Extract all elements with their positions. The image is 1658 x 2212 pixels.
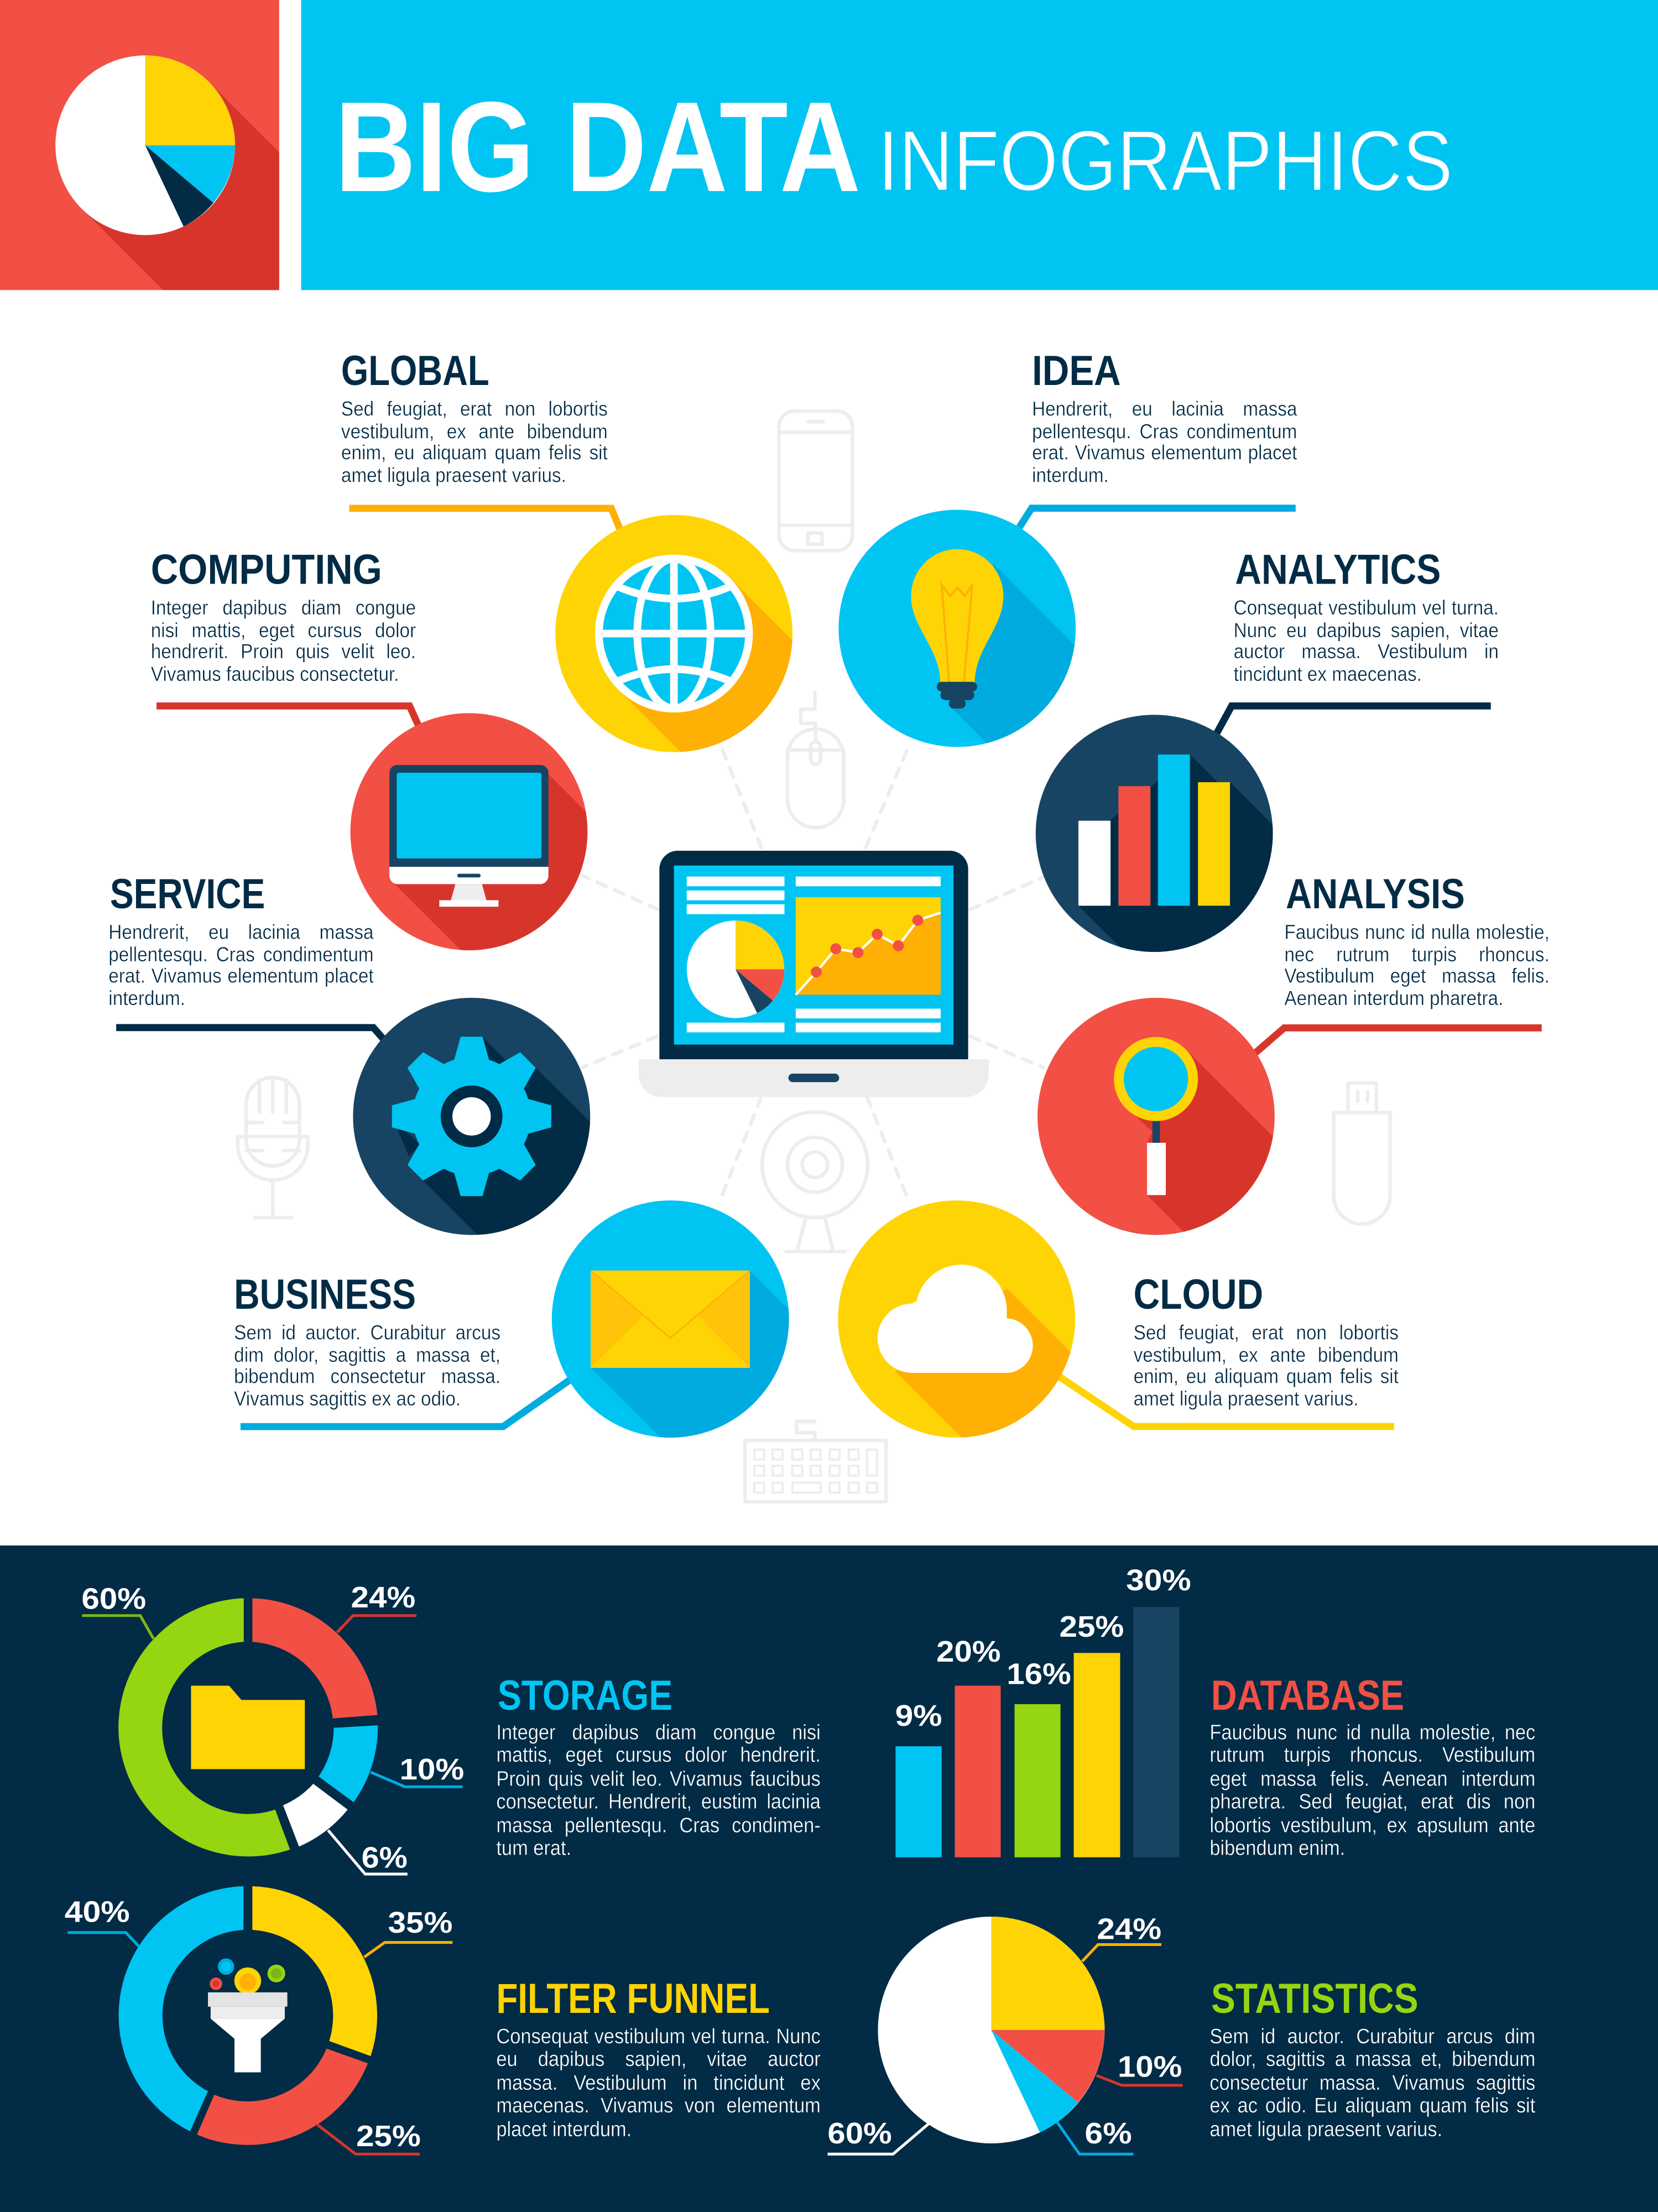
text block: service: pellentesqu. Cras condimentum — [108, 944, 374, 966]
connector: analysis — [1255, 1028, 1542, 1053]
bar chart: database — [895, 1564, 1191, 1857]
dashed links from laptop to circles — [582, 745, 1043, 1203]
text block: database — [1209, 1722, 1535, 1864]
text block: analytics: Nunc eu dapibus sapien, vitae — [1234, 620, 1499, 642]
laptop text bars — [687, 877, 941, 1032]
data labels: statistics: 6% — [1085, 2117, 1132, 2150]
icon: phone outline — [779, 411, 852, 551]
laptop pie chart — [687, 920, 784, 1018]
panel: idea — [838, 356, 1297, 747]
text block: global: amet ligula praesent varius. — [341, 465, 566, 487]
panel: global — [341, 355, 792, 752]
bar chart: database: 20% — [936, 1636, 1001, 1668]
text block: filter funnel — [496, 2026, 821, 2145]
text block: global: enim, eu aliquam quam felis sit — [341, 443, 608, 465]
text block: service — [108, 923, 374, 1013]
text block: database: lobortis vestibulum, ex apsulum ante — [1209, 1814, 1535, 1838]
text block: computing: hendrerit. Proin quis velit leo. — [151, 642, 416, 664]
panel: computing — [151, 554, 587, 950]
text block: business: bibendum consectetur massa. — [234, 1366, 500, 1389]
pie chart: statistics — [878, 1917, 1104, 2143]
text block: database: pharetra. Sed feugiat, erat dis non — [1209, 1791, 1535, 1814]
heading: global: GLOBAL — [341, 347, 489, 394]
connector: service — [116, 1028, 385, 1040]
icon: bar chart — [1035, 715, 1273, 952]
text block: business: Vivamus sagittis ex ac odio. — [234, 1388, 461, 1411]
text block: analytics — [1234, 599, 1499, 689]
donut chart: filter funnel — [119, 1886, 377, 2145]
heading: statistics: STATISTICS — [1211, 1975, 1419, 2022]
panel: cloud — [838, 1200, 1399, 1540]
text block: global: vestibulum, ex ante bibendum — [341, 421, 608, 443]
data labels: filter funnel: 35% — [388, 1907, 452, 1939]
text block: storage: consectetur. Hendrerit, eustim lacinia — [496, 1791, 821, 1814]
text block: idea: Hendrerit, eu lacinia massa — [1032, 399, 1297, 421]
connector: global — [349, 508, 621, 530]
text block: cloud: amet ligula praesent varius. — [1134, 1388, 1359, 1411]
heading: analysis: ANALYSIS — [1286, 871, 1465, 918]
title banner: INFOGRAPHICS — [878, 112, 1453, 209]
icon: globe — [555, 515, 792, 752]
bar chart: database: 30% — [1126, 1564, 1191, 1597]
icon: keyboard outline — [745, 1422, 886, 1502]
heading: service: SERVICE — [110, 871, 265, 918]
text block: analysis: Aenean interdum pharetra. — [1284, 988, 1503, 1011]
text block: filter funnel: placet interdum. — [496, 2118, 632, 2142]
header icon tile with pie chart — [0, 0, 279, 290]
text block: storage: Proin quis velit leo. Vivamus faucibus — [496, 1767, 821, 1791]
data labels: storage: 60% — [81, 1583, 146, 1615]
text block: computing — [151, 599, 416, 689]
data labels: statistics — [827, 1913, 1182, 2154]
connector: computing — [157, 706, 419, 726]
central laptop illustration — [639, 851, 989, 1097]
text block: storage: tum erat. — [496, 1837, 571, 1861]
icon: microphone outline — [238, 1078, 308, 1217]
heading: computing: COMPUTING — [151, 546, 382, 593]
text block: service: Hendrerit, eu lacinia massa — [108, 922, 374, 945]
connector: analytics — [1217, 706, 1491, 733]
text block: analytics: Consequat vestibulum vel turna. — [1234, 597, 1499, 620]
text block: analysis: Vestibulum eget massa felis. — [1284, 966, 1550, 988]
panel: filter funnel — [65, 1886, 821, 2154]
bar chart: database: 25% — [1060, 1611, 1124, 1643]
text block: filter funnel: eu dapibus sapien, vitae auctor — [496, 2048, 821, 2072]
text block: analysis — [1284, 923, 1550, 1013]
text block: cloud: Sed feugiat, erat non lobortis — [1134, 1323, 1399, 1345]
text block: business — [234, 1324, 500, 1414]
text block: statistics: dolor, sagittis a massa et, bibendum — [1209, 2048, 1535, 2072]
data labels: storage: 10% — [399, 1753, 464, 1786]
panel: statistics — [827, 1913, 1535, 2154]
text block: analytics: auctor massa. Vestibulum in — [1234, 642, 1499, 664]
panel: storage — [81, 1581, 821, 1874]
data labels: filter funnel: 25% — [356, 2120, 421, 2153]
data labels: statistics: 24% — [1097, 1913, 1161, 1945]
text block: storage: Integer dapibus diam congue nisi — [496, 1721, 821, 1745]
icon: folder — [191, 1685, 305, 1769]
text block: database: rutrum turpis rhoncus. Vestibulum — [1209, 1744, 1535, 1768]
text block: global: Sed feugiat, erat non lobortis — [341, 399, 608, 421]
title banner — [301, 0, 1658, 290]
icon: funnel — [208, 1958, 288, 2072]
panel: analytics — [1035, 554, 1498, 952]
text block: analysis: Faucibus nunc id nulla molestie, — [1284, 922, 1550, 945]
text block: analytics: tincidunt ex maecenas. — [1234, 664, 1422, 686]
text block: idea: pellentesqu. Cras condimentum — [1032, 421, 1297, 443]
text block: service: interdum. — [108, 988, 185, 1011]
heading: filter funnel: FILTER FUNNEL — [496, 1975, 770, 2022]
text block: filter funnel: massa. Vestibulum in tincidunt ex — [496, 2072, 821, 2095]
donut chart: storage — [118, 1598, 378, 1856]
text block: storage: mattis, eget cursus dolor hendrerit. — [496, 1744, 821, 1768]
panel: business — [234, 1200, 919, 1537]
panel: service — [110, 878, 591, 1235]
text block: statistics: amet ligula praesent varius. — [1209, 2118, 1442, 2142]
text block: cloud: enim, eu aliquam quam felis sit — [1134, 1366, 1399, 1389]
data labels: filter funnel: 40% — [65, 1896, 130, 1928]
text block: statistics: consectetur massa. Vivamus sagittis — [1209, 2072, 1535, 2095]
data labels: storage: 6% — [362, 1841, 408, 1874]
connector: business — [241, 1379, 571, 1427]
icon: magnifying glass — [1037, 998, 1355, 1365]
panel: analysis — [1037, 871, 1550, 1365]
text block: idea: interdum. — [1032, 465, 1109, 487]
text block: idea — [1032, 400, 1297, 491]
text block: statistics: ex ac odio. Eu aliquam quam felis sit — [1209, 2095, 1535, 2119]
text block: computing: Integer dapibus diam congue — [151, 597, 416, 620]
heading: analytics: ANALYTICS — [1235, 546, 1441, 593]
bar chart: database: 9% — [895, 1700, 942, 1732]
text block: filter funnel: Consequat vestibulum vel turna. Nunc — [496, 2025, 821, 2049]
heading: idea: IDEA — [1032, 347, 1121, 394]
text block: business: Sem id auctor. Curabitur arcus — [234, 1323, 500, 1345]
laptop line chart — [796, 897, 941, 995]
text block: computing: Vivamus faucibus consectetur. — [151, 664, 399, 686]
icon: gear — [353, 998, 591, 1235]
title banner: BIG DATA — [335, 75, 861, 218]
text block: database: eget massa felis. Aenean interdum — [1209, 1767, 1535, 1791]
heading: business: BUSINESS — [234, 1271, 416, 1318]
text block: business: dim dolor, sagittis a massa et, — [234, 1345, 500, 1367]
text block: statistics — [1209, 2026, 1535, 2145]
panel: database — [895, 1564, 1535, 1864]
icon: mouse outline — [788, 693, 844, 827]
icon: desktop monitor — [351, 713, 587, 950]
heading: cloud: CLOUD — [1134, 1271, 1263, 1318]
icon: light bulb — [838, 510, 1076, 747]
connector: cloud — [1059, 1376, 1394, 1427]
text block: cloud: vestibulum, ex ante bibendum — [1134, 1345, 1399, 1367]
bar chart: database: 16% — [1007, 1658, 1071, 1690]
data labels: statistics: 60% — [827, 2117, 892, 2150]
dark statistics section — [0, 1545, 1658, 2212]
heading: database: DATABASE — [1211, 1672, 1404, 1719]
background line icons and dashed links — [238, 411, 1390, 1502]
data labels: statistics: 10% — [1118, 2050, 1182, 2083]
text block: service: erat. Vivamus elementum placet — [108, 966, 374, 988]
text block: storage: massa pellentesqu. Cras condimen- — [496, 1814, 821, 1838]
text block: storage — [496, 1722, 821, 1864]
icon: USB drive outline — [1334, 1083, 1390, 1224]
data labels: storage: 24% — [351, 1581, 415, 1614]
text block: analysis: nec rutrum turpis rhoncus. — [1284, 944, 1550, 966]
icon: webcam outline — [762, 1112, 868, 1252]
text block: computing: nisi mattis, eget cursus dolor — [151, 620, 416, 642]
text block: database: Faucibus nunc id nulla molestie, nec — [1209, 1721, 1535, 1745]
data labels: storage — [81, 1581, 464, 1874]
data labels: filter funnel — [65, 1896, 452, 2154]
text block: global — [341, 400, 608, 491]
text block: statistics: Sem id auctor. Curabitur arcus dim — [1209, 2025, 1535, 2049]
connector: idea — [1019, 508, 1296, 527]
text block: cloud — [1134, 1324, 1399, 1414]
text block: idea: erat. Vivamus elementum placet — [1032, 443, 1297, 465]
text block: filter funnel: maecenas. Vivamus von elementum — [496, 2095, 821, 2119]
text block: database: bibendum enim. — [1209, 1837, 1345, 1861]
icon: cloud — [838, 1200, 1176, 1540]
heading: storage: STORAGE — [498, 1672, 672, 1719]
icon: envelope — [552, 1200, 919, 1537]
header — [0, 0, 1658, 290]
